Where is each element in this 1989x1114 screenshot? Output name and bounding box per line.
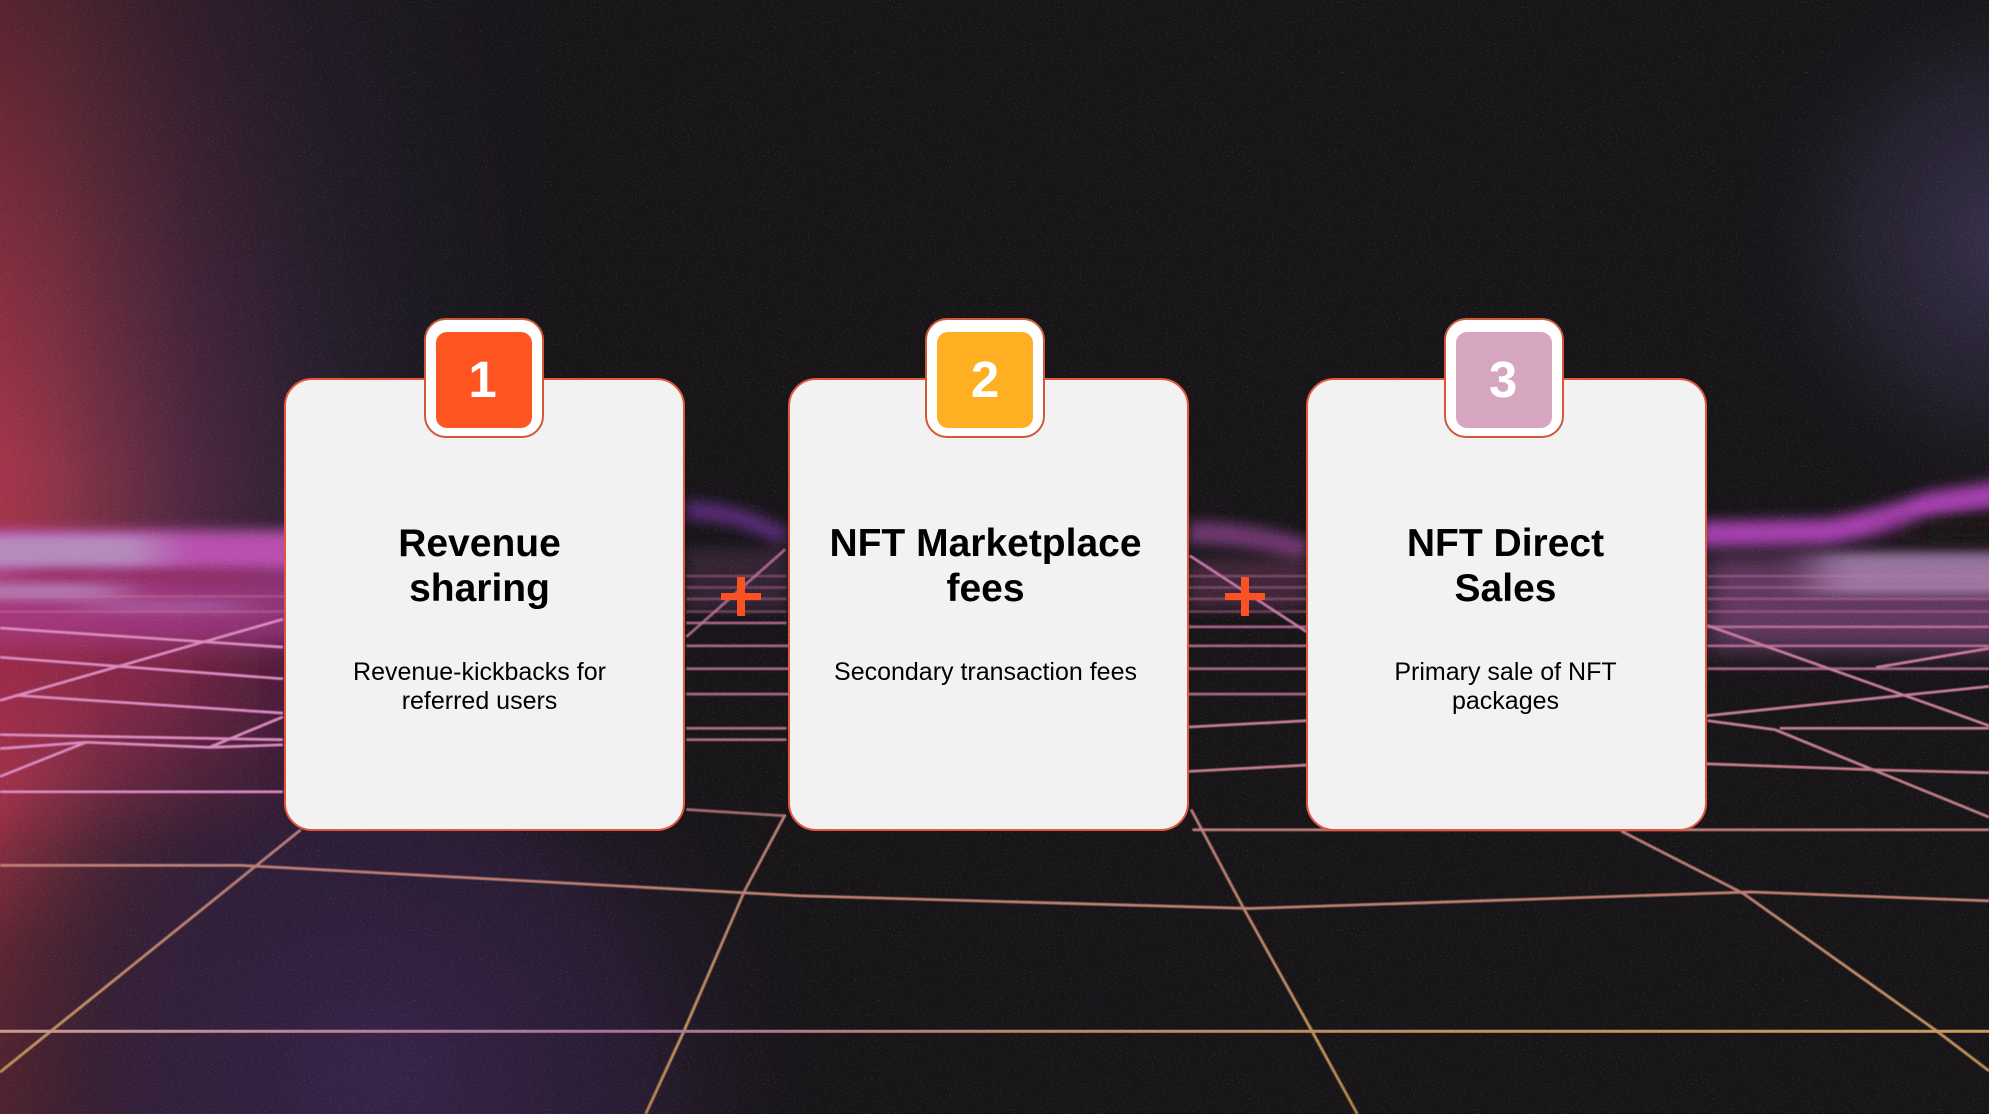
- description: NFT direct sales: [1394, 658, 1617, 715]
- heading: revenue sharing: [398, 522, 561, 610]
- heading: NFT marketplace fees: [829, 522, 1142, 610]
- plus sign between 1 and 2: [721, 577, 761, 616]
- bottom purple haze: [0, 609, 863, 1114]
- right blue haze: [1649, 0, 1989, 533]
- badge: number 3: [1444, 318, 1564, 438]
- bright far horizontal line: [0, 1030, 1989, 1033]
- panel: revenue sharing: [284, 318, 685, 831]
- badge: number 1: [424, 318, 544, 438]
- description: revenue sharing: Revenue-kickbacks for: [353, 658, 606, 686]
- heading: NFT direct sales: NFT Direct: [1407, 522, 1604, 564]
- badge: number 2: 2: [971, 351, 999, 408]
- heading: NFT direct sales: [1407, 522, 1604, 610]
- badge: number 2: [925, 318, 1045, 438]
- heading: revenue sharing: Revenue: [398, 522, 561, 564]
- badge: number 1: 1: [468, 351, 497, 408]
- badge: number 3: 3: [1489, 351, 1517, 408]
- panel: NFT marketplace fees: [788, 318, 1189, 831]
- panel: NFT direct sales: [1306, 318, 1707, 831]
- description: revenue sharing: referred users: [402, 687, 557, 715]
- left horizon glow: [0, 521, 284, 825]
- description: NFT direct sales: Primary sale of NFT: [1394, 658, 1617, 686]
- card background: [1306, 378, 1707, 831]
- description: NFT direct sales: packages: [1452, 687, 1559, 715]
- heading: revenue sharing: sharing: [409, 567, 550, 610]
- left red glow: [0, 0, 558, 1114]
- heading: NFT marketplace fees: fees: [946, 567, 1025, 610]
- card background: [284, 378, 685, 831]
- card background: [788, 378, 1189, 831]
- description: revenue sharing: [353, 658, 606, 715]
- heading: NFT direct sales: Sales: [1455, 567, 1556, 610]
- perspective grid lines: [0, 549, 1989, 1114]
- middle horizon glow: [686, 510, 1307, 612]
- right horizon glow: [1700, 491, 1989, 651]
- description: NFT marketplace fees: Secondary transaction fees: [834, 658, 1137, 686]
- heading: NFT marketplace fees: NFT Marketplace: [829, 522, 1142, 564]
- plus sign between 2 and 3: [1225, 577, 1265, 616]
